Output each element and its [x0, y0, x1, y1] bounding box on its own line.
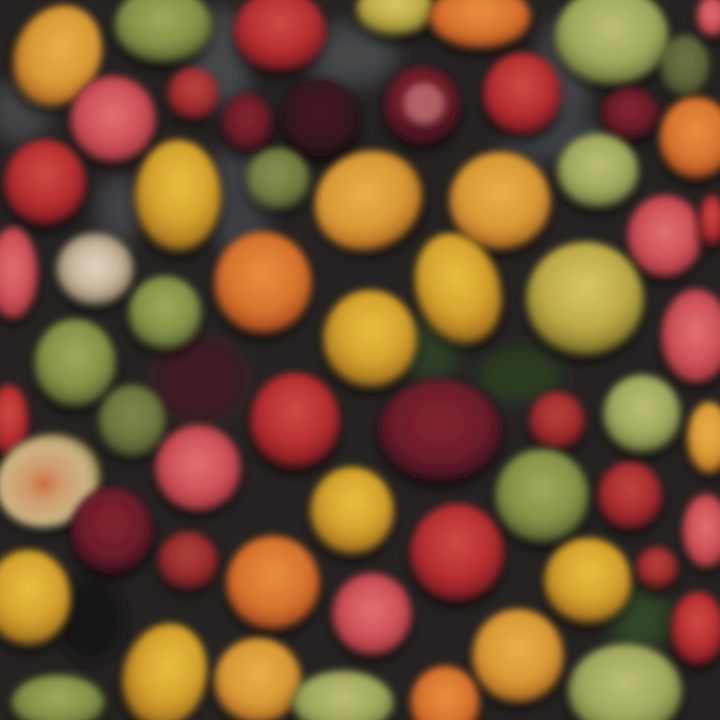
fruit: dark maroon: [282, 80, 358, 156]
fruit: pink right edge: [683, 494, 720, 566]
fruit: pink slice: [71, 76, 155, 160]
fruit: small red right: [602, 88, 658, 138]
fruit: pink lower: [156, 425, 240, 509]
fruit: light green right: [604, 375, 680, 451]
fruit: green bottom centre: [293, 671, 393, 720]
fruit: red right lower: [672, 592, 720, 664]
fruit: yellow pear: [136, 140, 220, 250]
fruit: dark red lower left: [72, 488, 152, 572]
fruit: small red: [168, 68, 218, 118]
fruit: orange yellow right edge: [688, 402, 720, 472]
fruit: green lower left: [35, 319, 115, 405]
fruit: yellow centre: [324, 290, 416, 386]
fruit: yellow pear top left: [0, 0, 118, 119]
fruit: red right edge: [700, 195, 720, 245]
fruit: red lower centre: [411, 504, 503, 600]
fruit: red lower right: [599, 462, 661, 528]
fruit: green lower right: [496, 449, 588, 541]
fruit: light green top right: [556, 0, 668, 83]
fruit: cut peach: [0, 420, 112, 540]
fruit: pink lower centre: [333, 573, 411, 653]
fruit: large dark maroon: [380, 380, 500, 480]
fruit: green bottom left: [12, 675, 104, 720]
fruit: large yellow green: [527, 242, 643, 354]
fruit: pink right: [662, 289, 720, 381]
fruit: tiny red: [637, 547, 677, 587]
fruit: pale centre highlight: [404, 83, 444, 123]
fruit: orange yellow bottom: [473, 609, 563, 701]
fruit: olive: [247, 148, 309, 208]
fruit: dark green: [99, 385, 165, 455]
fruit: red left edge: [0, 227, 37, 317]
fruit: orange right edge: [660, 97, 720, 177]
fruit: orange bottom: [411, 666, 479, 720]
fruit: green left: [129, 276, 201, 348]
fruit: orange top: [430, 0, 530, 47]
fruit: pink red: [385, 67, 459, 143]
fruit: orange yellow round: [450, 152, 550, 248]
fruit: light green bottom right: [569, 644, 681, 720]
fruit: red upper right: [484, 53, 560, 133]
fruit: red left edge lower: [0, 385, 28, 455]
fruit: dark red: [222, 94, 272, 150]
fruit: tan orange bottom: [215, 638, 301, 720]
fruit: orange lower: [227, 536, 319, 628]
fruit: white: [57, 233, 133, 303]
fruit: green top: [115, 0, 211, 61]
fruit: small dark red: [159, 532, 217, 588]
fruit: red corner: [697, 0, 720, 35]
fruit: yellow pear centre: [402, 222, 514, 354]
fruit: red top: [235, 0, 325, 70]
fruit: orange centre left: [215, 232, 311, 332]
fruit: yellow lower right: [545, 538, 631, 622]
fruit: orange yellow mango: [299, 134, 437, 266]
fruit: red centre: [251, 373, 339, 467]
fruit: red left: [5, 140, 85, 224]
fruit: pale green top: [357, 0, 433, 34]
fruit: green yellow: [558, 134, 638, 206]
fruit: pink red right: [628, 195, 702, 275]
fruit: yellow left edge: [0, 550, 70, 644]
fruit: green leaf right: [661, 35, 709, 95]
fruit: yellow pear bottom: [112, 614, 218, 720]
fruit: small red centre right: [530, 392, 584, 448]
fruit: yellow lower centre: [311, 467, 393, 553]
